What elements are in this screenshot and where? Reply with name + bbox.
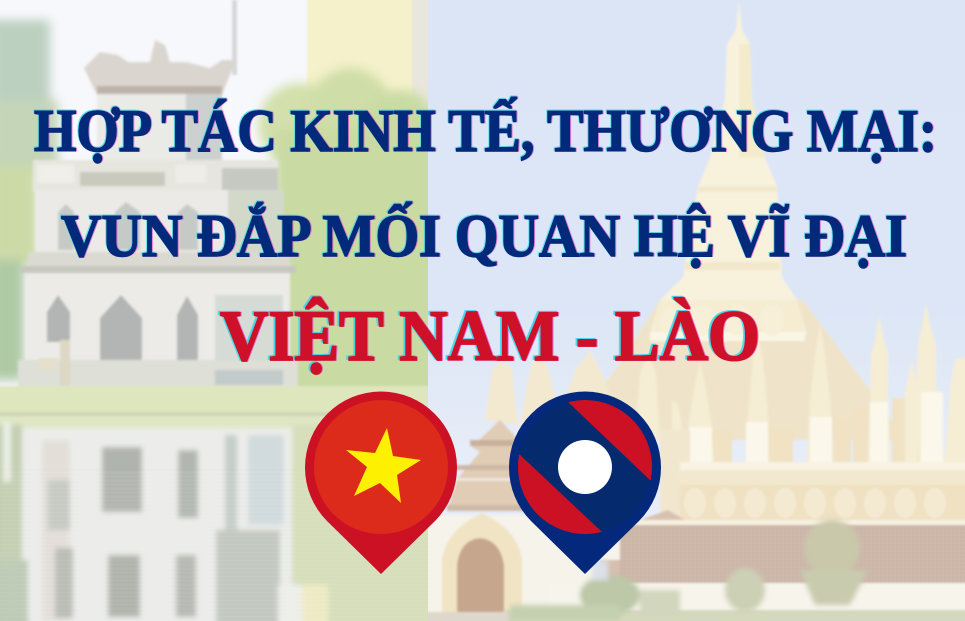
icon: Vietnam flag map pin — [305, 392, 457, 574]
title: Vietnam-Laos economic and trade cooperation — [34, 98, 937, 376]
title line 2: VUN ĐẮP MỐI QUAN HỆ VĨ ĐẠI — [61, 203, 907, 269]
icon: Laos flag map pin — [509, 392, 661, 574]
background photo: That Luang stupa, Vientiane — [418, 0, 965, 621]
background photo: Hanoi Turtle Tower — [0, 0, 442, 621]
title line 3: VIỆT NAM - LÀO — [220, 296, 760, 376]
